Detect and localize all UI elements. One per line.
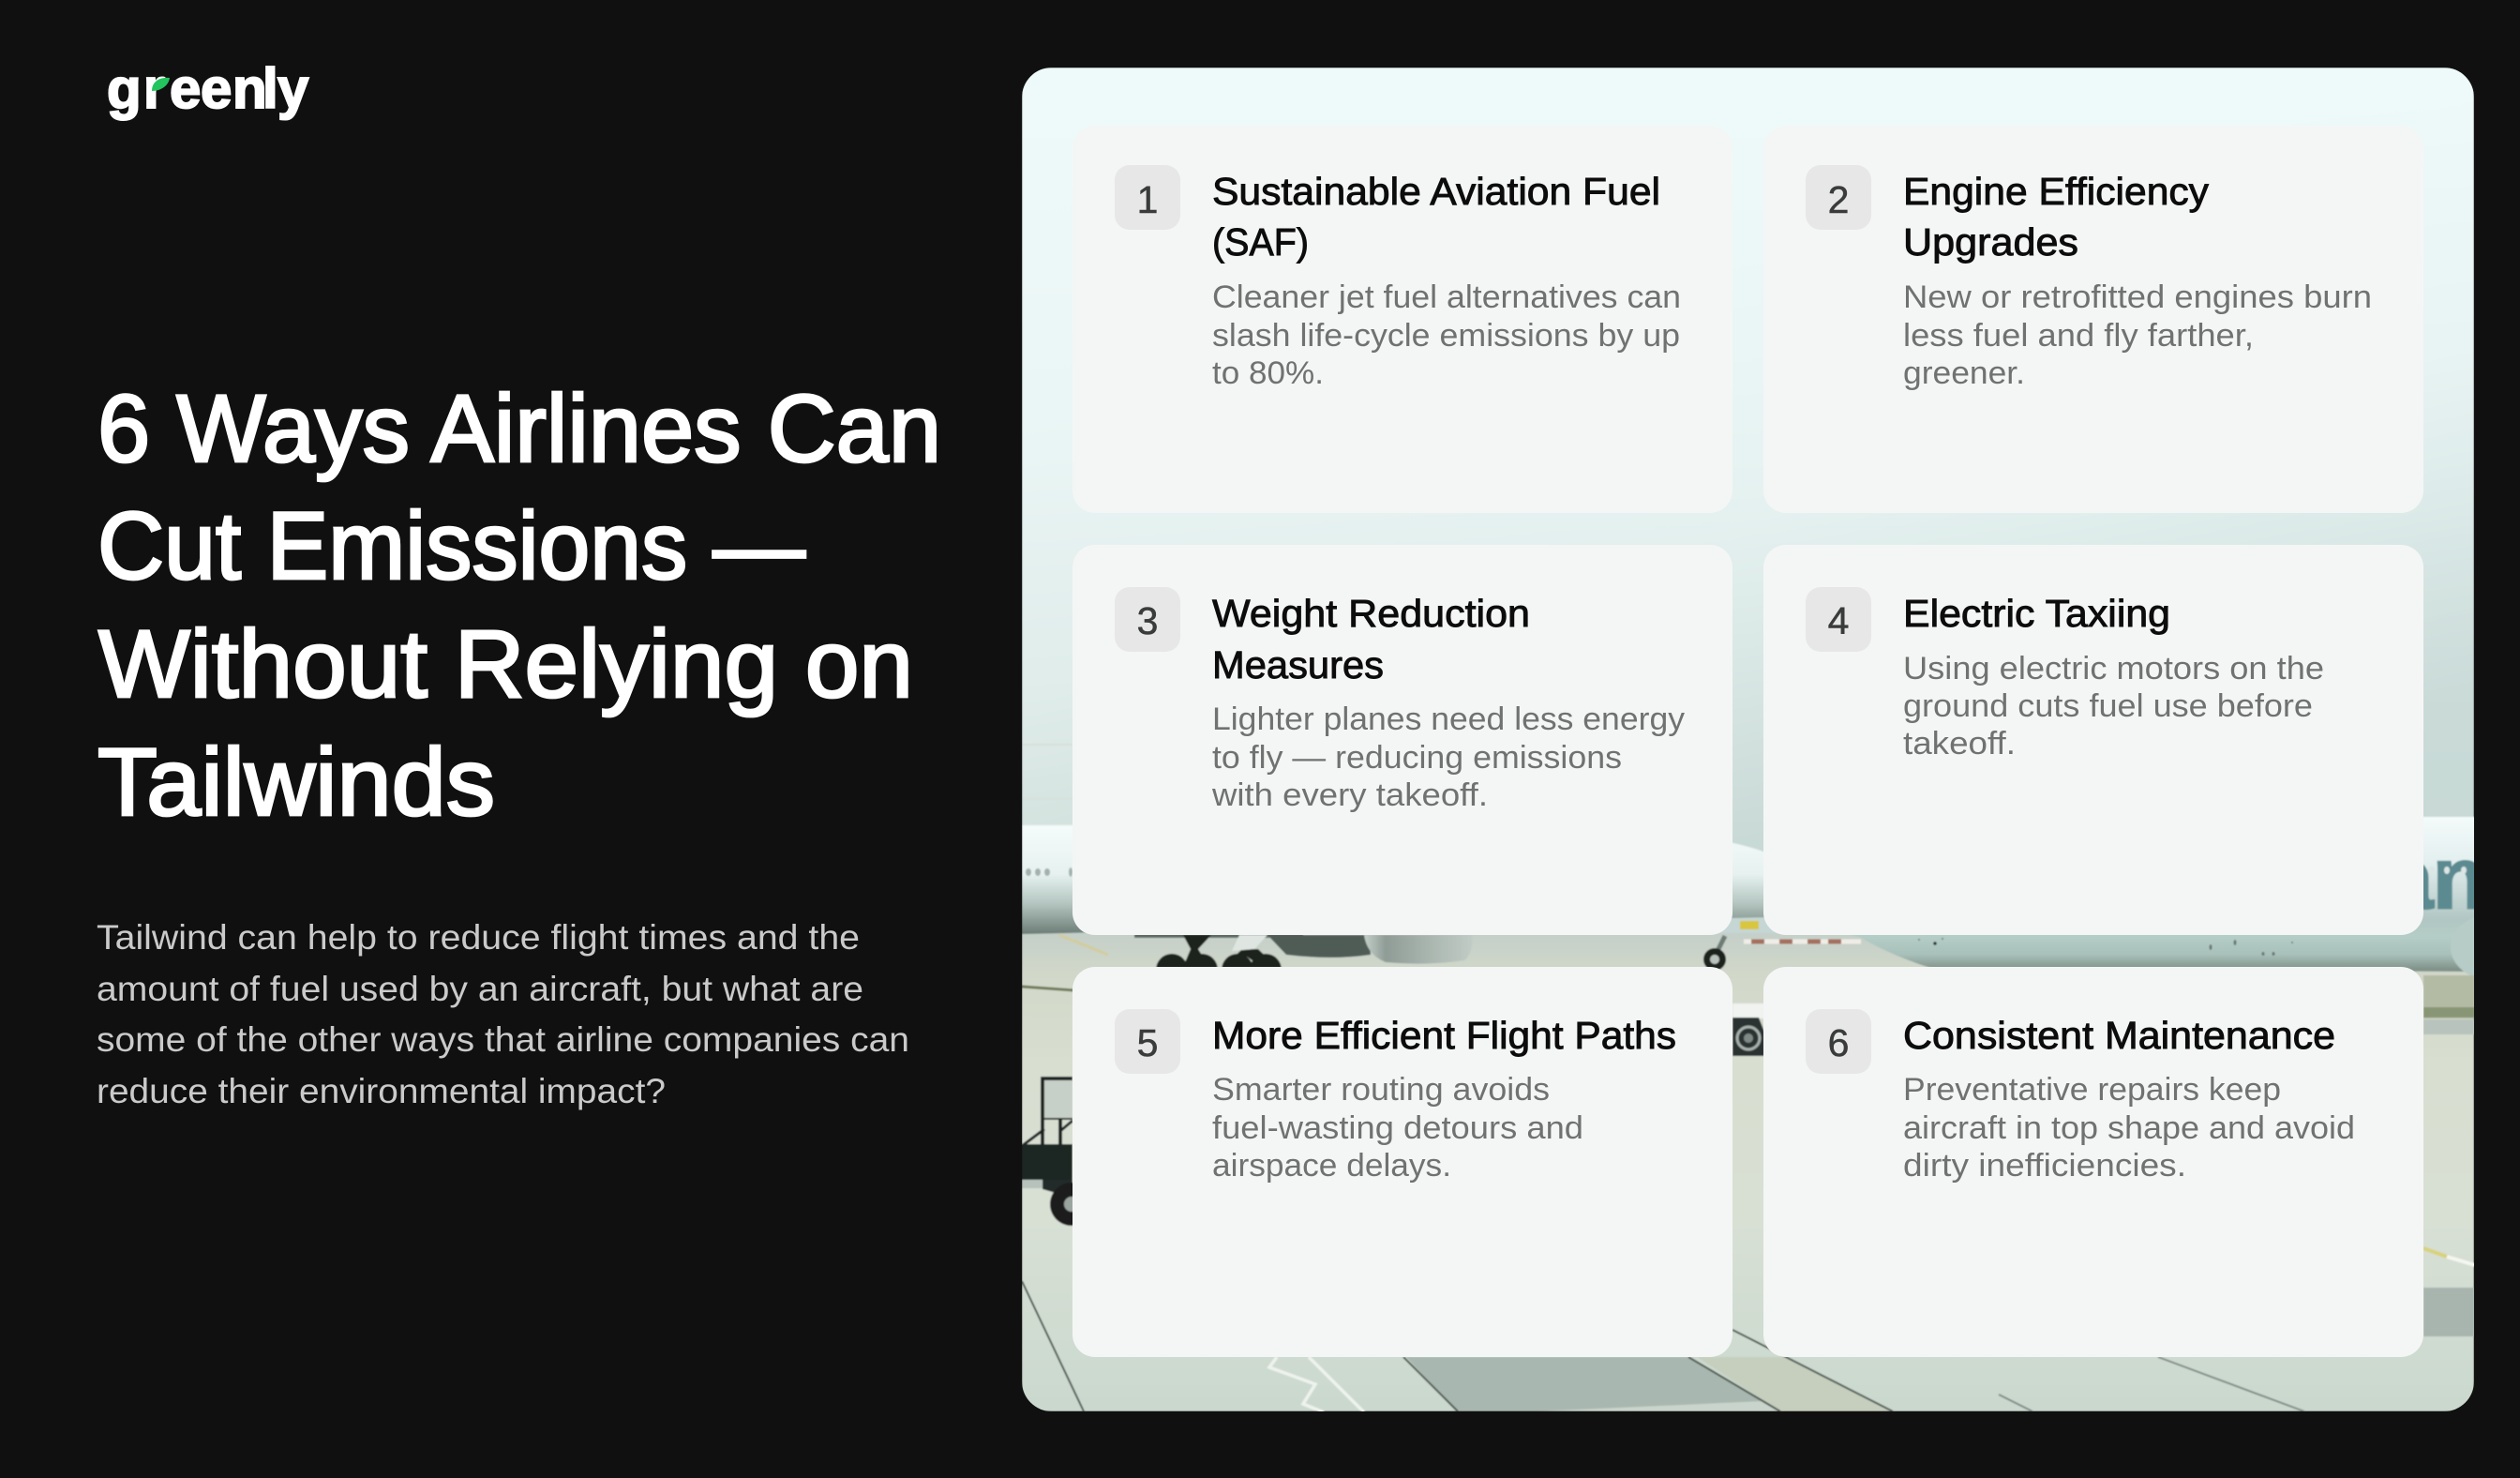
- cabin windows, left: [1026, 867, 1072, 877]
- description: Using electric motors on the: [1903, 651, 2324, 686]
- nose gear: [1703, 936, 1726, 971]
- heading: Weight Reduction: [1212, 592, 1530, 635]
- description: slash life-cycle emissions by up: [1212, 318, 1680, 354]
- number badge 2: 2: [1828, 178, 1849, 221]
- number badge 1: 1: [1137, 178, 1158, 221]
- grass strip, right: [2423, 975, 2476, 1018]
- description: [1903, 279, 2372, 391]
- fuselage specks: [1918, 938, 2293, 956]
- number badge 3: [1115, 587, 1180, 652]
- gear door: [1232, 935, 1268, 951]
- description: to fly — reducing emissions: [1212, 740, 1622, 776]
- number badge 4: 4: [1828, 599, 1849, 642]
- icon: green leaf: [152, 78, 170, 91]
- apron patch, right: [2423, 1288, 2476, 1336]
- description: [1903, 651, 2324, 762]
- description: takeoff.: [1903, 726, 2016, 762]
- intro paragraph: Tailwind can help to reduce flight times and the: [97, 918, 860, 957]
- white service vehicle with wheel: [1732, 1003, 1764, 1056]
- dark concrete slab: [1406, 1357, 1780, 1411]
- description: dirty inefficiencies.: [1903, 1148, 2186, 1184]
- title: Tailwinds: [98, 729, 495, 836]
- card background: [1072, 967, 1732, 1357]
- card 4: Electric Taxiing: [1763, 545, 2423, 935]
- number badge 6: 6: [1828, 1021, 1849, 1064]
- heading: Sustainable Aviation Fuel: [1212, 170, 1660, 213]
- ground service truck: [1022, 1076, 1072, 1227]
- number badge 6: [1806, 1009, 1871, 1074]
- card background: [1763, 126, 2423, 513]
- description: with every takeoff.: [1211, 777, 1488, 813]
- engine: [1364, 935, 1472, 964]
- card 6: Consistent Maintenance: [1763, 967, 2423, 1357]
- description: fuel-wasting detours and: [1212, 1110, 1583, 1146]
- card background: [1072, 545, 1732, 935]
- engine nacelle: [1268, 935, 1371, 958]
- description: to 80%.: [1212, 355, 1324, 391]
- card 5: More Efficient Flight Paths: [1072, 967, 1732, 1357]
- description: aircraft in top shape and avoid: [1903, 1110, 2355, 1146]
- description: ground cuts fuel use before: [1903, 688, 2313, 724]
- sky: [1022, 68, 2474, 940]
- barrier: [1744, 940, 1861, 943]
- fuselage lettering: an: [2385, 831, 2485, 927]
- yellow apron marking, right: [2423, 1248, 2447, 1257]
- title: 6 Ways Airlines Can: [98, 375, 941, 482]
- panel: airport photo background: [1022, 68, 2520, 1412]
- description: Smarter routing avoids: [1212, 1072, 1550, 1108]
- description: Preventative repairs keep: [1903, 1072, 2281, 1108]
- heading: Engine Efficiency: [1903, 170, 2210, 213]
- grass strip, left: [1022, 987, 1074, 990]
- aircraft fuselage, right: [1781, 817, 2475, 972]
- logo: greenly: greenly: [107, 57, 309, 120]
- heading: [1212, 592, 1530, 686]
- description: Cleaner jet fuel alternatives can: [1212, 279, 1681, 315]
- heading: [1903, 170, 2210, 264]
- intro paragraph: some of the other ways that airline companies can: [97, 1020, 909, 1059]
- apron yellow marking: [1059, 935, 1108, 955]
- number badge 1: [1115, 165, 1180, 230]
- heading: (SAF): [1212, 220, 1309, 264]
- apron ground: [1022, 933, 2474, 1411]
- description: airspace delays.: [1212, 1148, 1451, 1184]
- heading: Upgrades: [1903, 220, 2078, 264]
- wing shadow: [1133, 935, 1303, 939]
- description: [1212, 1072, 1583, 1184]
- intro paragraph: reduce their environmental impact?: [97, 1072, 666, 1110]
- number badge 4: [1806, 587, 1871, 652]
- main landing gear: [1155, 935, 1282, 967]
- card background: [1763, 545, 2423, 935]
- title: Without Relying on: [98, 611, 913, 717]
- beige concrete patch: [1697, 1357, 1893, 1411]
- description: less fuel and fly farther,: [1903, 318, 2254, 354]
- intro paragraph: amount of fuel used by an aircraft, but what are: [97, 970, 863, 1008]
- number badge 2: [1806, 165, 1871, 230]
- heading: Consistent Maintenance: [1903, 1014, 2335, 1057]
- heading: More Efficient Flight Paths: [1212, 1014, 1676, 1057]
- card 2: Engine Efficiency Upgrades: [1763, 126, 2423, 513]
- card background: [1072, 126, 1732, 513]
- description: Lighter planes need less energy: [1212, 701, 1685, 737]
- card 1: Sustainable Aviation Fuel: [1072, 126, 1732, 513]
- heading: Measures: [1212, 643, 1384, 686]
- description: [1903, 1072, 2355, 1184]
- distant terminal haze: [1023, 745, 1072, 746]
- apron lines: [1022, 1281, 2304, 1411]
- intro paragraph: [97, 918, 909, 1110]
- number badge 3: 3: [1137, 599, 1158, 642]
- card 3: Weight Reduction Measures: [1072, 545, 1732, 935]
- description: greener.: [1903, 355, 2025, 391]
- description: [1212, 279, 1681, 391]
- description: [1211, 701, 1685, 813]
- number badge 5: 5: [1137, 1021, 1158, 1064]
- number badge 5: [1115, 1009, 1180, 1074]
- windows on lettering: [2443, 866, 2468, 875]
- engine, right: [2451, 917, 2474, 976]
- title: Cut Emissions —: [98, 492, 805, 599]
- aircraft fuselage, left: [1022, 825, 1772, 934]
- heading: Electric Taxiing: [1903, 592, 2170, 635]
- title: [98, 375, 941, 836]
- white zig-zag taxi lines: [1269, 1357, 1364, 1412]
- light strip on slab: [1538, 1401, 1780, 1411]
- heading: [1212, 170, 1660, 264]
- description: New or retrofitted engines burn: [1903, 279, 2372, 315]
- yellow ground equipment: [1740, 921, 1759, 929]
- card background: [1763, 967, 2423, 1357]
